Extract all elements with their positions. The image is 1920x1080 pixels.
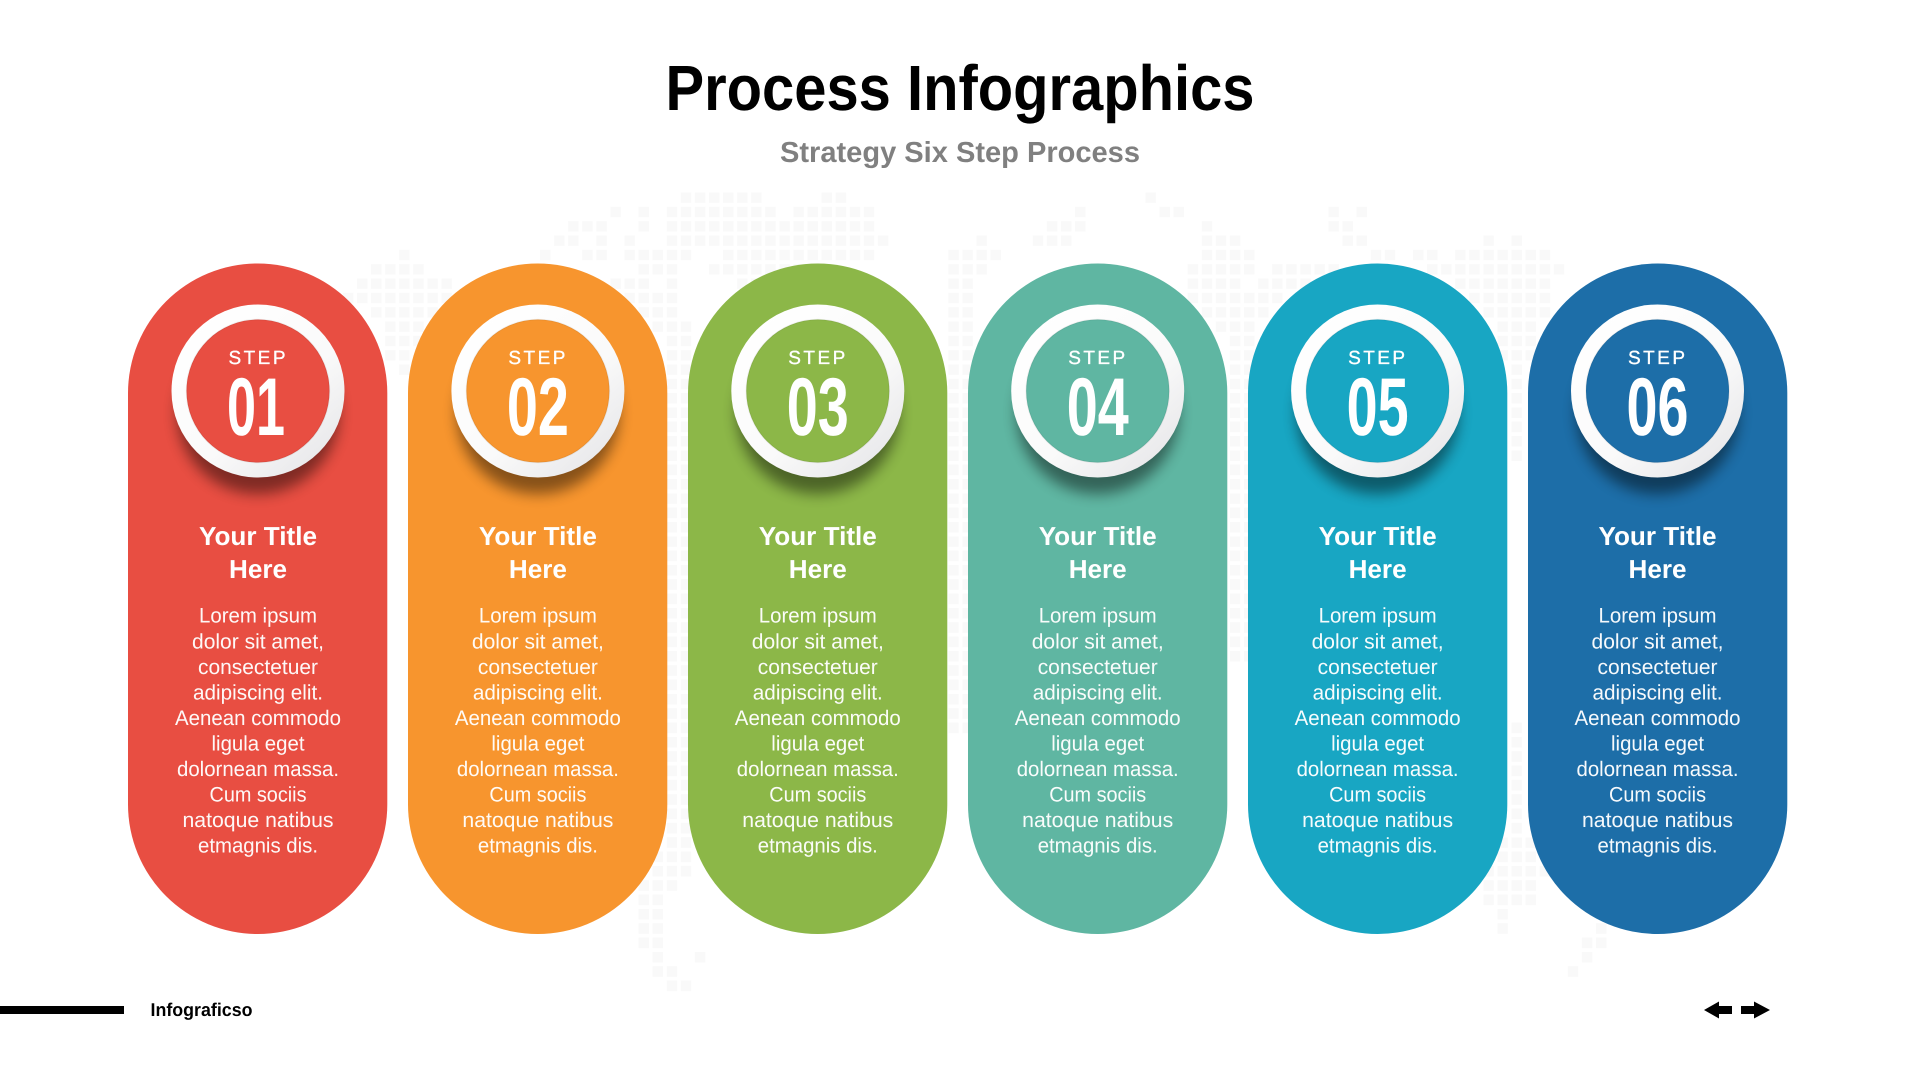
- text block: step 04: natoque natibus: [1022, 809, 1173, 832]
- text block: step 04: etmagnis dis.: [1038, 835, 1158, 858]
- text block: step 04: Cum sociis: [1049, 784, 1146, 807]
- text block: step 01: Cum sociis: [210, 784, 306, 807]
- text block: step 05: dolor sit amet,: [1312, 630, 1444, 653]
- heading: step 02: Your Title: [479, 521, 597, 551]
- text block: step 05: Aenean commodo: [1295, 707, 1461, 730]
- text block: step 01: Aenean commodo: [175, 707, 341, 730]
- icon: step 01 badge: STEP: [228, 348, 286, 369]
- heading: step 06: Your Title: [1598, 521, 1716, 551]
- text block: step 03: Cum sociis: [769, 784, 866, 807]
- icon: step 05 badge: STEP: [1348, 348, 1405, 369]
- heading: step 03: [759, 521, 877, 584]
- icon: step 05 badge: [1291, 304, 1464, 494]
- icon: step 02 badge: 02: [507, 362, 569, 453]
- heading: step 01: Here: [229, 554, 287, 584]
- text block: step 03: dolornean massa.: [737, 758, 899, 781]
- heading: step 01: [199, 521, 317, 584]
- text block: step 01: etmagnis dis.: [198, 835, 318, 858]
- icon: step 03 badge: STEP: [788, 348, 845, 369]
- text block: step 06: Lorem ipsum: [1598, 605, 1716, 628]
- text block: step 02: Aenean commodo: [455, 707, 621, 730]
- heading: step 05: Here: [1349, 554, 1407, 584]
- text block: step 05: Cum sociis: [1329, 784, 1426, 807]
- text block: step 06: ligula eget: [1611, 732, 1704, 756]
- text block: step 06: Aenean commodo: [1574, 707, 1740, 730]
- text block: step 01: consectetuer: [198, 656, 318, 679]
- text block: step 01: adipiscing elit.: [193, 681, 323, 704]
- panel: step 04: [968, 264, 1227, 934]
- icon: step 05 badge: 05: [1347, 362, 1409, 453]
- heading: step 04: Here: [1069, 554, 1127, 584]
- text block: step 05: dolornean massa.: [1297, 758, 1459, 781]
- text block: step 05: etmagnis dis.: [1318, 835, 1438, 858]
- text block: step 04: ligula eget: [1051, 732, 1144, 756]
- icon: step 02 badge: STEP: [508, 348, 565, 369]
- text block: step 04: [1015, 605, 1181, 858]
- text block: step 01: dolor sit amet,: [192, 630, 324, 653]
- text block: step 02: dolornean massa.: [457, 758, 619, 781]
- text block: step 03: consectetuer: [758, 656, 878, 679]
- text block: step 03: ligula eget: [771, 732, 864, 756]
- heading: step 06: [1598, 521, 1716, 584]
- footer brand: Infograficso: [150, 999, 252, 1020]
- icon: step 03 badge: [731, 304, 904, 494]
- heading: step 02: Here: [509, 554, 567, 584]
- text block: step 03: etmagnis dis.: [758, 835, 878, 858]
- text block: step 03: Lorem ipsum: [759, 605, 877, 628]
- text block: step 05: Lorem ipsum: [1319, 605, 1437, 628]
- text block: step 04: adipiscing elit.: [1033, 681, 1163, 704]
- text block: step 06: natoque natibus: [1582, 809, 1733, 832]
- text block: step 06: dolor sit amet,: [1592, 630, 1724, 653]
- background: dotted world map: [343, 198, 1606, 986]
- icon: step 02 badge: [451, 304, 624, 494]
- text block: step 02: etmagnis dis.: [478, 835, 598, 858]
- icon: step 03 badge: 03: [787, 362, 849, 453]
- text block: step 01: natoque natibus: [182, 809, 334, 832]
- text block: step 05: natoque natibus: [1302, 809, 1453, 832]
- text block: step 05: ligula eget: [1331, 732, 1424, 756]
- text block: step 02: Cum sociis: [489, 784, 586, 807]
- title: Process Infographics: [666, 52, 1254, 124]
- text block: step 05: adipiscing elit.: [1313, 681, 1443, 704]
- heading: step 03: Here: [789, 554, 847, 584]
- text block: step 03: Aenean commodo: [735, 707, 901, 730]
- arrow: next: [1741, 1002, 1770, 1018]
- text block: step 01: dolornean massa.: [177, 758, 339, 781]
- heading: step 02: [479, 521, 597, 584]
- icon: step 06 badge: [1571, 304, 1744, 494]
- text block: step 03: natoque natibus: [742, 809, 893, 832]
- icon: step 06 badge: STEP: [1628, 348, 1685, 369]
- panel: step 05: [1248, 264, 1507, 934]
- text block: step 01: ligula eget: [212, 732, 305, 756]
- text block: step 02: ligula eget: [491, 732, 585, 756]
- icon: step 01 badge: 01: [227, 362, 285, 453]
- text block: step 04: Lorem ipsum: [1039, 605, 1157, 628]
- icon: step 04 badge: 04: [1067, 362, 1129, 453]
- text block: step 02: [455, 605, 621, 858]
- panel: step 03: [688, 264, 947, 934]
- heading: step 04: Your Title: [1039, 521, 1157, 551]
- text block: step 06: adipiscing elit.: [1592, 681, 1722, 704]
- text block: step 06: [1574, 605, 1740, 858]
- panel: step 06: [1528, 264, 1787, 934]
- heading: step 05: Your Title: [1319, 521, 1437, 551]
- text block: step 06: Cum sociis: [1609, 784, 1706, 807]
- heading: step 05: [1319, 521, 1437, 584]
- heading: step 01: Your Title: [199, 521, 317, 551]
- icon: step 01 badge: [172, 304, 344, 494]
- text block: step 02: Lorem ipsum: [479, 605, 597, 628]
- text block: step 06: dolornean massa.: [1576, 758, 1738, 781]
- text block: step 03: dolor sit amet,: [752, 630, 884, 653]
- text block: step 06: consectetuer: [1598, 656, 1718, 679]
- text block: step 01: Lorem ipsum: [199, 605, 317, 628]
- text block: step 03: [735, 605, 901, 858]
- heading: step 04: [1039, 521, 1157, 584]
- icon: step 04 badge: STEP: [1068, 348, 1125, 369]
- text block: step 03: adipiscing elit.: [753, 681, 883, 704]
- icon: step 06 badge: 06: [1626, 362, 1688, 453]
- text block: step 04: Aenean commodo: [1015, 707, 1181, 730]
- text block: step 01: [175, 605, 341, 858]
- text block: step 05: consectetuer: [1318, 656, 1438, 679]
- text block: step 02: natoque natibus: [462, 809, 613, 832]
- text block: step 05: [1295, 605, 1461, 858]
- icon: step 04 badge: [1011, 304, 1184, 494]
- text block: step 02: adipiscing elit.: [473, 681, 603, 704]
- panel: step 02: [408, 264, 667, 934]
- text block: step 02: dolor sit amet,: [472, 630, 604, 653]
- heading: step 06: Here: [1628, 554, 1686, 584]
- text block: step 02: consectetuer: [478, 656, 598, 679]
- text block: step 04: dolor sit amet,: [1032, 630, 1164, 653]
- text block: step 06: etmagnis dis.: [1598, 835, 1718, 858]
- heading: step 03: Your Title: [759, 521, 877, 551]
- panel: step 01: [128, 264, 387, 934]
- text block: step 04: consectetuer: [1038, 656, 1158, 679]
- text block: step 04: dolornean massa.: [1017, 758, 1179, 781]
- arrow: previous: [1704, 1002, 1732, 1018]
- footer bar: [0, 1006, 124, 1014]
- subtitle: Strategy Six Step Process: [780, 137, 1140, 169]
